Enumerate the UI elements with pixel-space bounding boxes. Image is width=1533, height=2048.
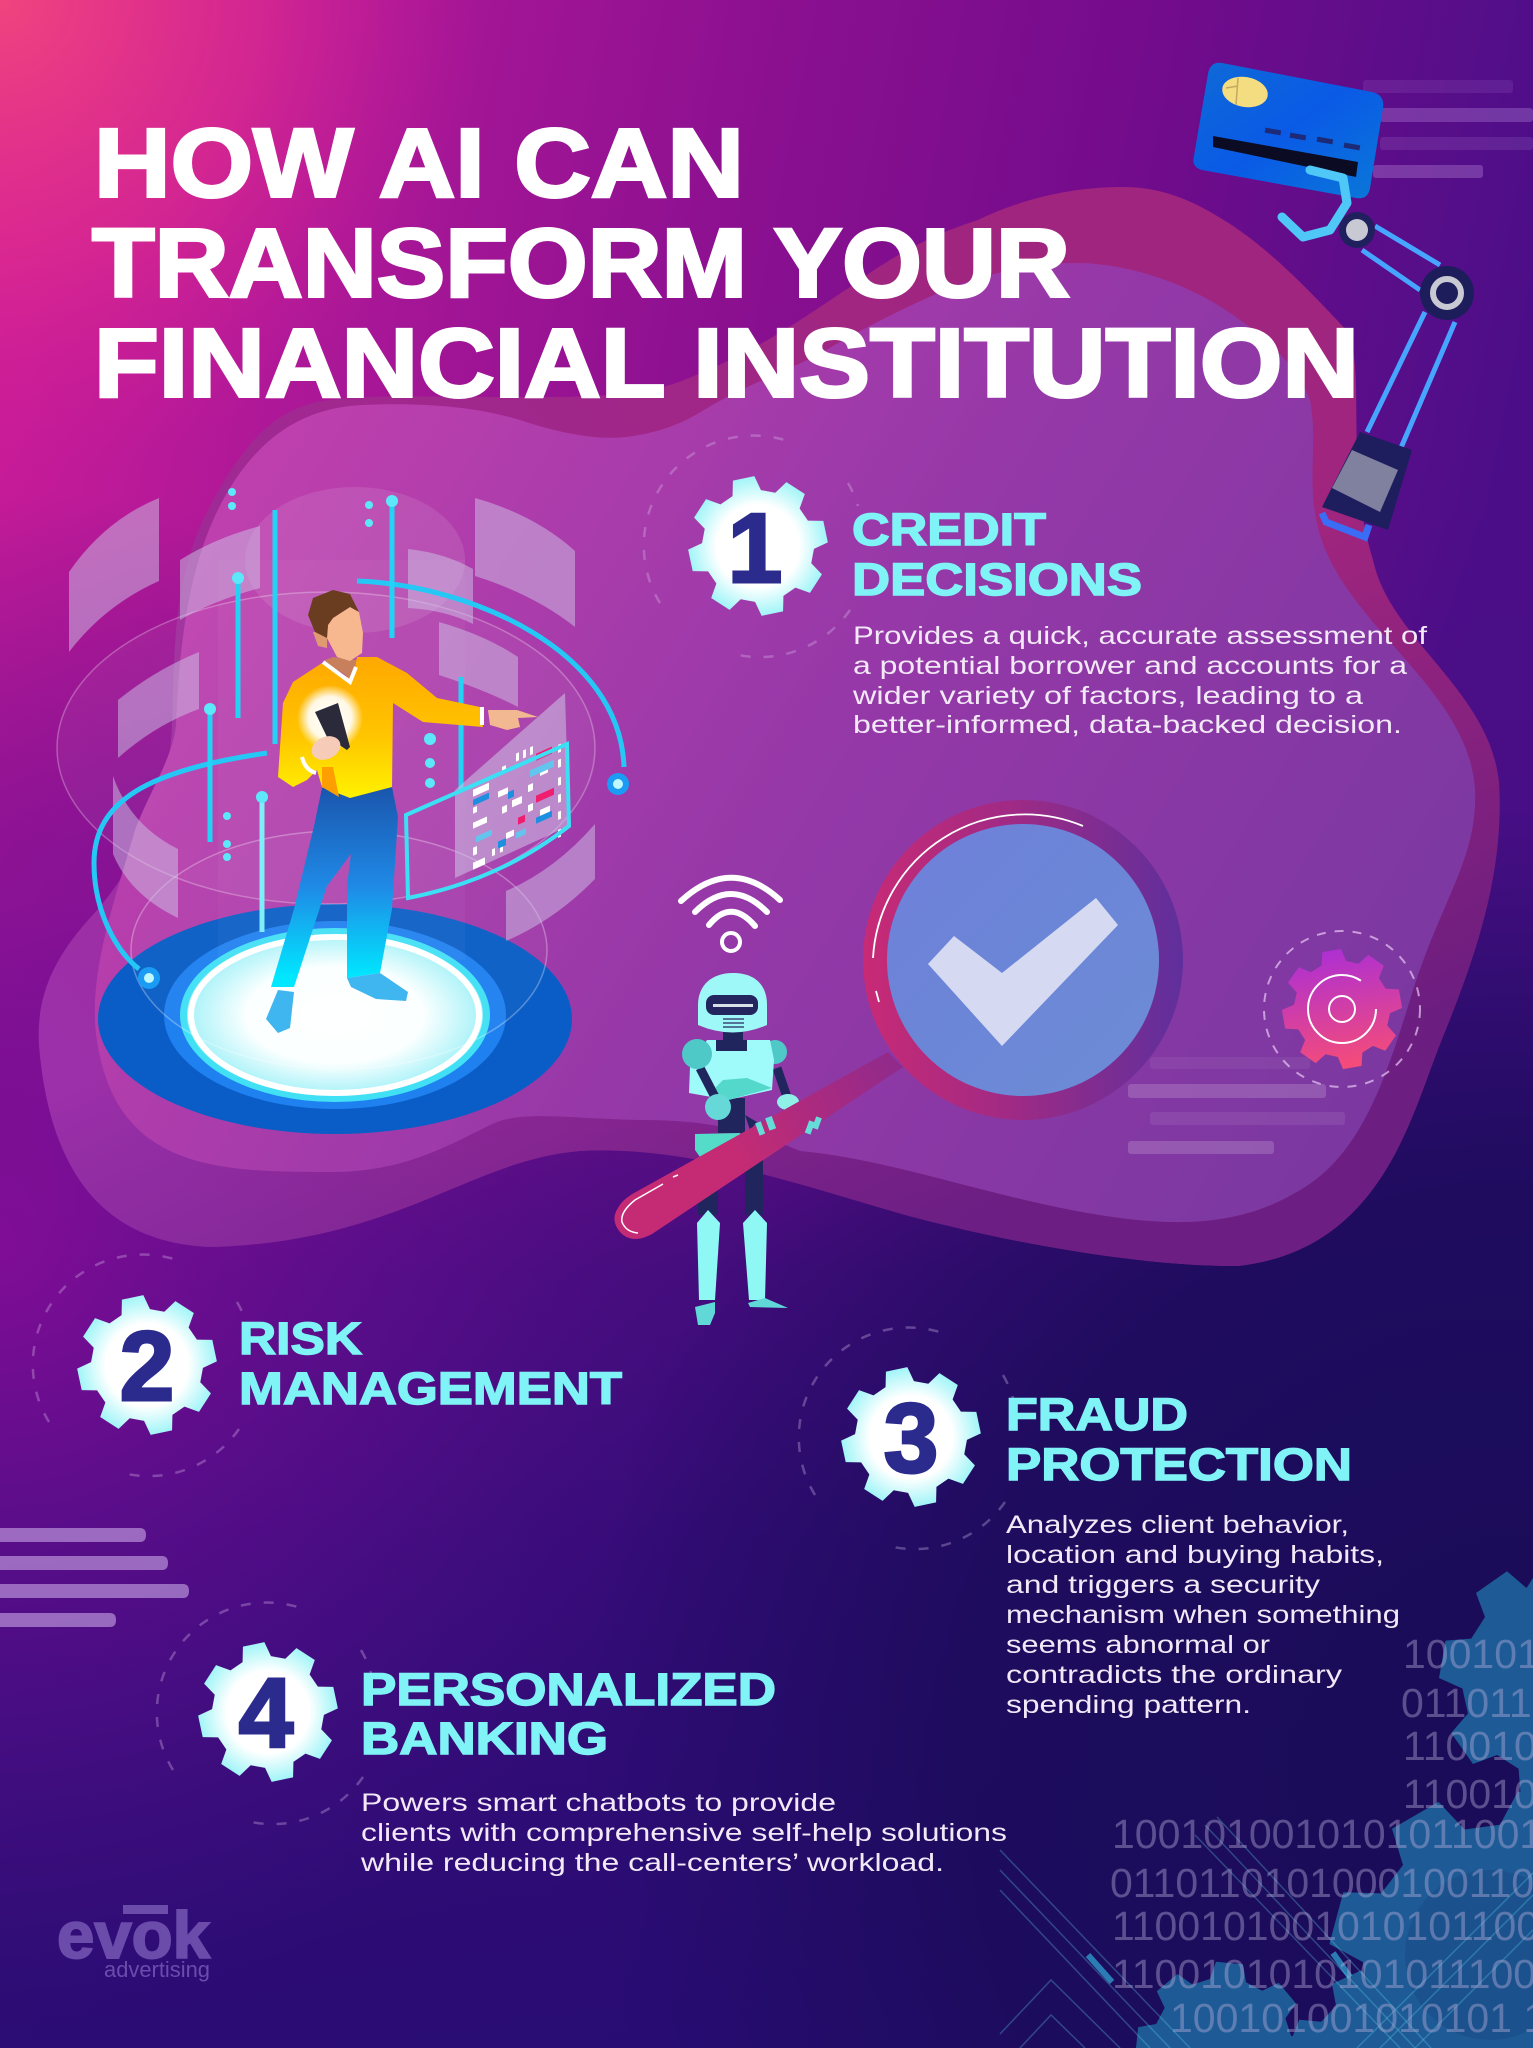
heading (1006, 1389, 1352, 1490)
bottom-right gears (1136, 1571, 1533, 2048)
heading: MANAGEMENT (239, 1363, 622, 1414)
badge 4: 4 (239, 1658, 293, 1768)
binary code text: lower: 1100101001010101100 (1112, 1903, 1533, 1949)
badge 2 (33, 1255, 247, 1476)
waist (718, 1098, 757, 1133)
neck (723, 1030, 743, 1042)
binary code text: upper: 011011 (1401, 1680, 1532, 1726)
body text: spending pattern. (1006, 1691, 1251, 1719)
icon: wifi signal (681, 878, 780, 951)
hand holding phone (308, 732, 344, 764)
body text: mechanism when something (1006, 1601, 1400, 1629)
heading: CREDIT (852, 504, 1046, 555)
handle (614, 1052, 903, 1239)
left arm (700, 1068, 715, 1097)
icon: robotic arm holding credit card (1193, 63, 1474, 537)
left elbow (705, 1094, 731, 1120)
body text: better-informed, data-backed decision. (853, 711, 1402, 739)
item 4: personalized banking (157, 1603, 1007, 1877)
lower joint (1420, 266, 1474, 320)
shoes (266, 973, 408, 1033)
binary code text: lower: 1100101010101011100 (1112, 1951, 1533, 1997)
body text: clients with comprehensive self-help solutions (361, 1819, 1007, 1847)
title (92, 108, 1359, 418)
lens (887, 824, 1159, 1096)
binary code text: lower: 1001010010101011001 (1112, 1811, 1533, 1857)
badge 1: 1 (728, 493, 782, 603)
arm beams (1362, 226, 1455, 450)
lens ring (863, 800, 1183, 1120)
background shape: inner blob (95, 263, 1475, 1222)
credit card (1193, 63, 1383, 198)
decorative bars: right of lens (1128, 1057, 1345, 1154)
heading (239, 1313, 622, 1414)
magnifying glass (614, 800, 1183, 1239)
phone glow (297, 685, 363, 751)
right hand (777, 1094, 799, 1110)
badge 4 (157, 1603, 371, 1824)
body text: and triggers a security (1006, 1571, 1321, 1599)
right shoulder (763, 1040, 787, 1064)
badge 2: 2 (120, 1311, 174, 1421)
body text (360, 1789, 1007, 1877)
robot fingers (755, 1116, 822, 1136)
cyan pins (210, 501, 461, 932)
data screen (406, 693, 569, 898)
binary code text: lower: 0110110101000100110 (1110, 1860, 1533, 1906)
heading: FRAUD (1006, 1389, 1188, 1440)
hips (695, 1133, 745, 1157)
heading: RISK (239, 1313, 363, 1364)
item 2: risk management (33, 1255, 622, 1476)
body text: seems abnormal or (1006, 1631, 1270, 1659)
body text: contradicts the ordinary (1006, 1661, 1343, 1689)
background shape: outer blob (39, 187, 1500, 1266)
upper joint (1339, 212, 1375, 248)
torso (689, 1040, 774, 1100)
upper legs (698, 1160, 763, 1215)
body text: Powers smart chatbots to provide (361, 1789, 836, 1817)
body text: Analyzes client behavior, (1006, 1511, 1349, 1539)
ring highlight (873, 814, 1083, 1002)
item 1: credit decisions (644, 436, 1427, 739)
platform disc (98, 904, 572, 1134)
decorative bars: top right (1363, 80, 1533, 178)
heading: BANKING (361, 1713, 608, 1764)
body text (852, 622, 1427, 739)
badge 3 (799, 1328, 1013, 1549)
badge 3: 3 (884, 1383, 938, 1493)
binary code text: upper: 110010 (1403, 1771, 1533, 1817)
sweater (278, 657, 483, 798)
translucent panels (69, 498, 595, 941)
binary code text: upper (1401, 1631, 1533, 1817)
person (266, 590, 538, 1033)
head (308, 590, 363, 680)
logo: evok advertising: evok (57, 1898, 210, 1972)
item 3: fraud protection (799, 1328, 1400, 1719)
body text: Provides a quick, accurate assessment of (853, 622, 1427, 650)
phone (315, 703, 350, 750)
heading (361, 1664, 776, 1764)
pointing hand (488, 710, 538, 730)
cyan arcs (94, 581, 624, 969)
sweater side shade (322, 767, 339, 797)
pants (271, 787, 398, 987)
right arm (777, 1068, 787, 1097)
circuit lines (1000, 1817, 1533, 2048)
body text: wider variety of factors, leading to a (852, 682, 1363, 710)
title: FINANCIAL INSTITUTION (94, 308, 1359, 418)
robot back parts: legs, waist, hips, torso (682, 973, 799, 1325)
heading: DECISIONS (852, 554, 1142, 605)
icon: small settings gear (1264, 931, 1420, 1087)
head (698, 973, 767, 1032)
decorative bars: left (0, 1528, 189, 1627)
arm base (1322, 432, 1412, 537)
heading: PERSONALIZED (361, 1664, 776, 1715)
sleeve cuffs (302, 707, 482, 773)
check mark (928, 898, 1118, 1046)
heading (852, 504, 1142, 605)
collar (323, 662, 356, 682)
arc end nodes (138, 773, 629, 989)
feet (695, 1298, 788, 1325)
badge 1 (644, 436, 858, 657)
claw (1282, 170, 1347, 237)
body text: location and buying habits, (1006, 1541, 1384, 1569)
illustration: person on holographic platform (57, 487, 629, 1134)
binary code text: upper: 110010 (1403, 1723, 1533, 1769)
pin heads and dots (204, 488, 436, 861)
left shoulder (682, 1039, 712, 1069)
holographic ellipses and column (57, 487, 595, 1069)
logo: evok advertising: advertising (104, 1957, 210, 1982)
heading: PROTECTION (1006, 1439, 1352, 1490)
lower legs (697, 1210, 767, 1300)
body text: while reducing the call-centers’ workload. (360, 1849, 944, 1877)
binary code text: lower (1110, 1811, 1533, 2041)
title: TRANSFORM YOUR (92, 208, 1070, 318)
title: HOW AI CAN (94, 108, 744, 218)
body text (1006, 1511, 1400, 1719)
body text: a potential borrower and accounts for a (853, 652, 1407, 680)
